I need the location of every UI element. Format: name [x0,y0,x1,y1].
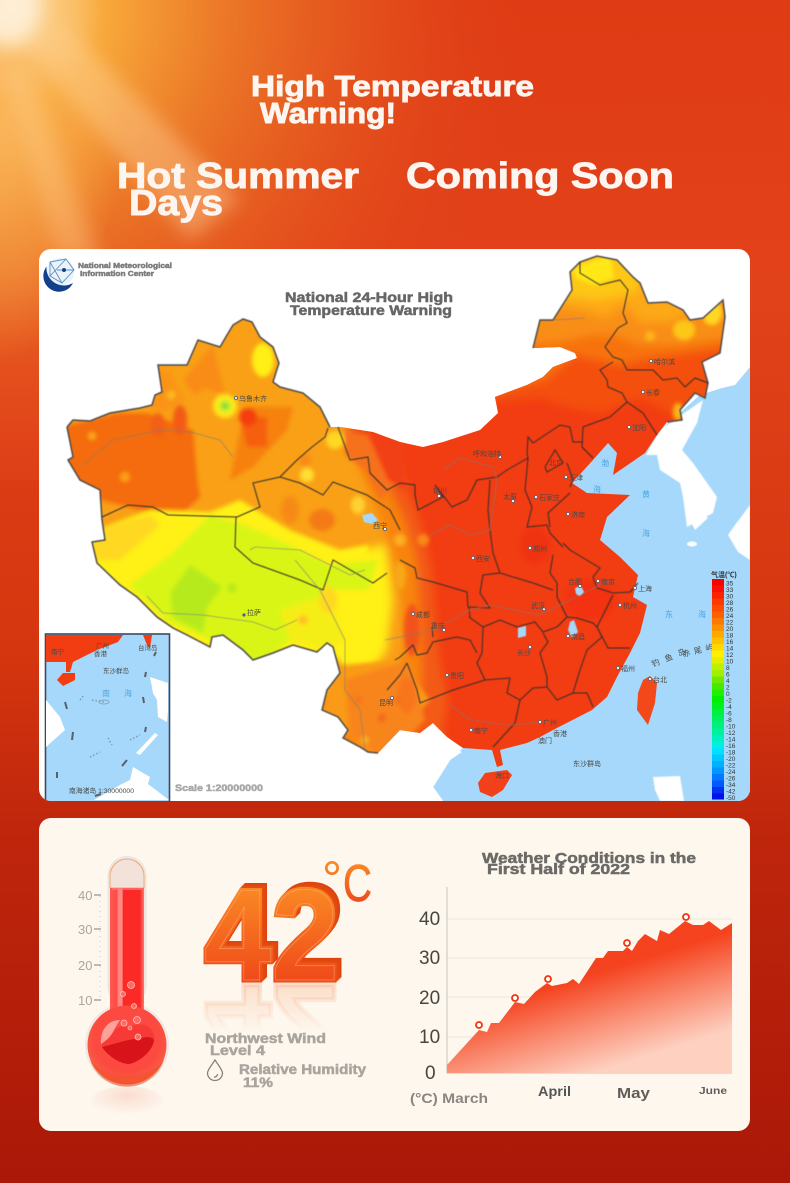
map city and sea labels: 武汉 [531,601,545,610]
x axis labels: June [699,1085,727,1097]
big temperature 42 [204,857,344,1103]
degree celsius unit [322,851,372,913]
subtitle: Coming Soon: Coming Soon [406,155,674,196]
icon: water drop [208,1060,222,1081]
temperature legend: -34 [726,782,736,789]
humidity info: 11% [243,1075,273,1090]
map title: Temperature Warning [290,303,452,318]
temperature legend: 30 [726,594,734,600]
big temperature 42: 42 [209,857,344,1003]
temperature legend: -26 [726,776,736,782]
neighbouring land [433,400,750,801]
x axis labels: April [538,1083,571,1099]
temperature legend: 12 [726,652,734,659]
degree celsius unit: C [343,855,372,913]
logo: National Meteorological Information Center: National Meteorological [78,261,172,270]
map city and sea labels: 乌鲁木齐 [239,394,267,403]
y axis labels: 20 [419,988,440,1009]
taiwan [637,676,657,725]
sun glow [0,0,560,480]
big temperature 42: 42 [204,957,339,1103]
inset: south china sea: 南海诸岛 1:30000000 [69,786,134,795]
map city and sea labels: 南昌 [571,632,585,641]
big temperature 42: 42 [204,862,339,1008]
map city and sea labels: 成都 [416,610,430,619]
chart markers [476,914,689,1028]
temperature legend: 24 [726,613,734,620]
temperature legend: 18 [726,632,734,640]
map city and sea labels: 合肥 [568,577,582,586]
temperature legend: -2 [726,698,732,704]
temperature legend: 33 [726,587,734,594]
thermometer scale: 40 [78,888,92,903]
temperature legend: 14 [726,646,734,652]
area chart [410,887,732,1106]
big temperature 42: 42 [204,862,339,1008]
temperature legend: -22 [726,762,736,770]
temperature legend: -4 [726,704,732,711]
logo: National Meteorological Information Center [44,258,172,291]
map city and sea labels: 海口 [495,771,509,780]
humidity info [239,1062,367,1090]
map city and sea labels: 郑州 [533,545,547,553]
big temperature 42: 42 [208,858,343,1004]
temperature legend: 16 [726,639,734,646]
map city and sea labels: 北京 [549,458,563,467]
temperature legend: 35 [726,580,734,588]
big temperature 42: 42 [205,861,340,1007]
temperature legend: 6 [726,672,730,678]
x axis labels: (°C) March [410,1090,488,1106]
temperature legend: -42 [726,788,736,796]
temperature legend: 28 [726,600,734,607]
map city and sea labels: 广州 [543,718,557,727]
map city and sea labels: 赤尾屿 [681,641,718,659]
map city and sea labels: 南宁 [474,726,488,735]
chart title: Weather Conditions in the [482,850,696,867]
inset: south china sea [46,634,170,802]
map city and sea labels: 昆明 [379,699,393,707]
inset: south china sea: 南 [102,688,110,698]
map city and sea labels: 杭州 [623,601,637,610]
temperature legend [711,570,737,802]
map city and sea labels: 福州 [621,664,635,673]
big temperature 42: 42 [206,860,341,1006]
inset: south china sea: 东沙群岛 [103,666,129,675]
temperature legend: -50 [726,795,736,802]
china outline, provinces and rivers [67,256,725,753]
thermometer [78,856,169,1118]
sea [433,367,750,801]
panel: current conditions and chart [39,818,750,1131]
temperature legend: 26 [726,606,734,614]
thermometer scale: 20 [78,958,92,973]
subtitle: Hot Summer Days [117,155,359,223]
inset: south china sea: 海 [124,688,132,698]
x axis labels [410,1083,727,1106]
title: High Temperature Warning: High Temperature [251,71,534,103]
map city and sea labels: 香港 [553,729,567,738]
degree celsius unit: ° [322,851,342,907]
temperature legend: -20 [726,756,736,763]
title: High Temperature Warning: Warning! [260,98,396,130]
y axis labels: 40 [419,909,440,930]
map city and sea labels: 东沙群岛 [573,759,601,768]
temperature legend: -10 [726,724,736,730]
map city and sea labels: 贵阳 [450,671,464,680]
map city and sea labels: 西宁 [373,521,387,530]
map city and sea labels: 长春 [646,388,660,397]
temperature legend: -16 [726,743,736,750]
big temperature 42: 42 [207,859,342,1005]
map city and sea labels: 西安 [476,554,490,563]
map title [285,290,453,318]
humidity info: Relative Humidity [239,1062,367,1077]
map city and sea labels: 拉萨 [247,608,261,617]
scale label: Scale 1:20000000 [175,783,263,793]
inset: south china sea: 香港 [94,649,108,658]
temperature legend: -24 [726,769,736,776]
wind info [205,1030,326,1058]
temperature legend: 0 [726,691,730,698]
temperature legend: 20 [726,626,734,633]
temperature legend: -8 [726,717,732,724]
thermometer scale [78,888,101,1008]
subtitle: Hot Summer Days: Days [129,182,223,223]
map city and sea labels: 黄 [642,489,650,499]
inset: south china sea: 台湾岛 [138,643,158,652]
map city and sea labels: 石家庄 [539,493,560,502]
title: High Temperature Warning [251,71,534,130]
map city and sea labels: 南京 [601,577,615,586]
temperature legend: 4 [726,678,730,685]
thermometer scale: 30 [78,922,92,937]
map city and sea labels: 渤 [601,458,609,468]
thermometer scale: 10 [78,993,92,1008]
map city and sea labels: 澳门 [538,736,552,745]
temperature legend: 2 [726,684,730,692]
temperature legend: 22 [726,620,734,626]
chart title: First Half of 2022 [487,861,630,878]
wind info: Northwest Wind [205,1030,326,1046]
map city and sea labels: 上海 [638,584,652,593]
map city and sea labels: 海 [593,484,601,494]
map city and sea labels: 银川 [433,486,447,495]
y axis labels [419,909,440,1084]
logo: National Meteorological Information Center: Information Center [80,269,154,278]
map city and sea labels: 呼和浩特 [473,449,501,458]
x axis labels: May [617,1085,651,1102]
map city and sea labels: 重庆 [431,621,445,630]
y axis labels: 0 [425,1063,436,1084]
y axis labels: 10 [419,1027,440,1048]
temperature legend: -6 [726,710,732,718]
map city and sea labels: 沈阳 [632,423,646,432]
chart title [482,850,696,878]
temperature legend: -14 [726,736,736,744]
map city and sea labels: 台北 [653,675,667,684]
map city and sea labels: 哈尔滨 [654,357,675,366]
map city and sea labels: 钓鱼岛 [650,644,693,669]
map city and sea labels: 太原 [503,492,517,501]
temperature legend: 气温(℃) [711,570,737,579]
temperature legend: -18 [726,750,736,756]
inset: south china sea: 广州 [96,641,109,650]
hainan [478,770,512,797]
subtitle: Hot Summer Days: Hot Summer [117,155,359,196]
temperature legend: 10 [726,658,734,666]
map city and sea labels: 长沙 [517,648,531,657]
y axis labels: 30 [419,948,440,969]
map city and sea labels: 海 [698,609,706,619]
map city and sea labels: 济南 [571,510,585,519]
china land with temperature contours [67,256,725,767]
map title: National 24-Hour High [285,290,453,305]
panel: temperature map [39,240,750,802]
wind info: Level 4 [210,1042,265,1058]
temperature legend: 8 [726,665,730,672]
map city and sea labels: 东 [665,609,673,619]
map city and sea labels: 天津 [569,474,583,482]
temperature legend: -12 [726,730,736,737]
map city and sea labels [234,357,718,780]
inset: south china sea: 南宁 [51,647,64,656]
map city and sea labels: 海 [642,528,650,538]
